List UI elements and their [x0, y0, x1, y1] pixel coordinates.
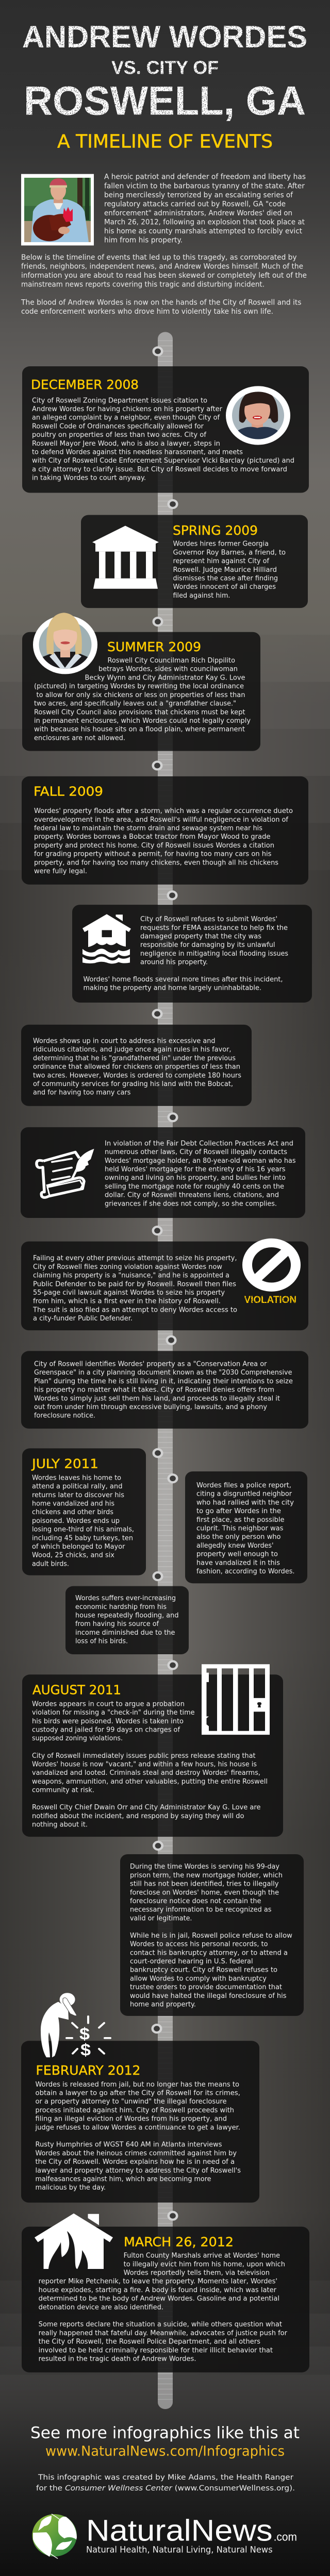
text block: vandalized and looted. Criminals steal and destroy Wordes' firearms,: [32, 1769, 260, 1777]
icon: courthouse: [92, 526, 159, 589]
portrait: Kay G. Love: [33, 613, 97, 674]
text block: Wordes innocent of all charges: [173, 583, 276, 591]
icon: despairing man with scattered money: $: [80, 2041, 91, 2059]
text block: Wordes files a police report,: [196, 1482, 291, 1489]
logo wordmark: .com: [274, 2531, 297, 2543]
text block: culprit. This neighbor was: [196, 1524, 283, 1532]
icon: despairing man with scattered money: $: [79, 2025, 90, 2043]
text block: with because his house sits on a flood plain, where permanent: [34, 725, 245, 733]
heading: Summer 2009: SUMMER 2009: [107, 640, 201, 655]
text block: to go after Wordes in the: [196, 1507, 281, 1515]
footer credit: [36, 2473, 295, 2493]
text block: ordinance that allowed for chickens on properties of less than: [33, 1063, 240, 1071]
text block: responsible for damaging by its unlawful: [140, 941, 275, 949]
text block: [173, 540, 286, 600]
text block: During the time Wordes is serving his 99-day: [130, 1863, 279, 1871]
panel: zoning violation: [21, 1242, 308, 1330]
text block: Wood, 25 chicks, and six: [32, 1551, 114, 1560]
text block: Wordes reportedly tells them, via television: [124, 2269, 270, 2277]
text block: in permanent enclosures, which Wordes could not legally comply: [34, 717, 251, 725]
text block: citing a disgruntled neighbor: [196, 1490, 292, 1498]
text block: foreclose on Wordes' home, even though the: [130, 1889, 279, 1896]
text block: lawyer and property attorney to address the City of Roswell's: [35, 2166, 241, 2175]
text block: allow Wordes to comply with bankruptcy: [130, 1975, 267, 1982]
text block: community at risk.: [32, 1786, 94, 1794]
text block: Roswell Code of Ordinances specifically allowed for: [32, 422, 204, 430]
text block: Andrew Wordes for having chickens on his property after: [32, 405, 222, 413]
title: ROSWELL, GA: [24, 78, 306, 124]
text block: Becky Wynn and City Administrator Kay G. Love: [85, 674, 245, 682]
text block: making the property and home largely uninhabitable.: [83, 984, 261, 992]
icon: jail cell door: [202, 1664, 270, 1735]
text block: [32, 1474, 134, 1568]
text block: [32, 397, 294, 482]
text block: filed against him.: [173, 591, 230, 600]
heading: August 2011: AUGUST 2011: [32, 1683, 121, 1698]
footer call to action: www.NaturalNews.com/Infographics: [45, 2443, 285, 2459]
text block: his property no matter what it takes. City of Roswell denies offers from: [34, 1386, 274, 1394]
text block: Wordes to simply just sell them his land, and proceeds to illegally steal it: [34, 1395, 280, 1402]
text block: [32, 1804, 261, 1828]
text block: with City of Roswell Code Enforcement Supervisor Vicki Barclay (pictured) and: [32, 457, 294, 465]
text block: Wordes about the heinous crimes committed against him by: [35, 2149, 237, 2157]
text block: Roswell Mayor Jere Wood, who is also a lawyer, steps in: [32, 439, 220, 448]
text block: Wordes is released from jail, but no longer has the means to: [35, 2080, 239, 2089]
text block: out from under him through excessive bullying, lawsuits, and a phony: [34, 1403, 267, 1411]
text block: Some reports declare the situation a suicide, while others question what: [39, 2320, 282, 2329]
text block: trustee orders to provide documentation that: [130, 1984, 282, 1991]
text block: resulted in the tragic death of Andrew Wordes.: [39, 2355, 196, 2363]
text block: Roswell City Chief Dwain Orr and City Administrator Kay G. Love are: [32, 1804, 261, 1811]
text block: negligence in mitigating local flooding issues: [140, 950, 288, 958]
text block: violation for missing a "check-in" during the time: [32, 1709, 195, 1717]
panel: conservation area: [21, 1351, 308, 1429]
text block: two acres, and specifically leaves out a "grandfather clause.": [34, 700, 236, 707]
text block: who had rallied with the city: [196, 1499, 294, 1506]
text block: [105, 1140, 296, 1208]
text block: owning and living on his property, and bullies her into: [105, 1174, 286, 1182]
text block: City of Roswell files zoning violation against Wordes now: [33, 1263, 222, 1271]
text block: chickens and other birds: [32, 1509, 113, 1516]
text block: [130, 1931, 292, 2008]
text block: [32, 1752, 268, 1794]
text block: custody and jailed for 99 days on charges of: [32, 1726, 180, 1734]
title: ANDREW WORDES: [22, 20, 307, 55]
text block: two acres. However, Wordes is ordered to complete 180 hours: [33, 1072, 241, 1079]
intro closing statement: [21, 298, 302, 316]
text block: determined to be the body of Andrew Wordes. Gasoline and a potential: [39, 2295, 279, 2302]
text block: for grading property without a permit, for having too many cars on his: [34, 850, 271, 858]
text block: contact his bankruptcy attorney, or to attend a: [130, 1949, 288, 1957]
text block: [32, 1700, 195, 1742]
text block: first place, as the possible: [196, 1516, 285, 1524]
text block: selling the mortgage note for roughly 40 cents on the: [105, 1183, 284, 1191]
text block: and for having too many cars: [33, 1089, 130, 1096]
text block: detonation device are also identified.: [39, 2303, 163, 2311]
text block: City of Roswell immediately issues public press release stating that: [32, 1752, 256, 1760]
portrait: Vicki Barclay: [226, 386, 290, 445]
text block: Rusty Humphries of WGST 640 AM in Atlanta interviews: [35, 2141, 222, 2148]
text block: represent him against City of: [173, 557, 270, 565]
text block: enclosures are not allowed.: [34, 734, 125, 742]
text block: a city attorney to clarify issue. But City of Roswell decides to move forward: [32, 465, 287, 473]
text block: really happened that fateful day. Meanwhile, advocates of justice push for: [39, 2329, 287, 2337]
text block: While he is in jail, Roswell police refuse to allow: [130, 1931, 292, 1940]
text block: still has not been identified, tries to illegally: [130, 1880, 279, 1888]
text block: [39, 2252, 285, 2311]
intro timeline explanation: [21, 252, 307, 289]
text block: malfeasances against him, which are becoming more: [35, 2175, 211, 2183]
text block: damaged property that the city was: [140, 933, 261, 940]
label: violation: VIOLATION: [244, 1295, 296, 1306]
intro closing statement: code enforcement workers who drove him to violently take his own life.: [21, 307, 273, 316]
text block: to defend Wordes against this needless harassment, and meets: [32, 448, 243, 456]
text block: the City of Roswell, the Roswell Police Department, and all others: [39, 2338, 260, 2346]
panel: Spring 2009: [81, 515, 308, 608]
intro paragraph: him from his property.: [104, 235, 183, 244]
text block: dismisses the case after finding: [173, 574, 278, 582]
text block: income diminished due to the: [75, 1629, 175, 1637]
text block: his birds were poisoned. Wordes is taken into: [32, 1717, 184, 1725]
text block: Greenspace" in a city planning document known as the "2030 Comprehensive: [34, 1369, 292, 1377]
intro paragraph: fallen victim to the barbarous tyranny of the state. After: [104, 181, 305, 190]
intro paragraph: being mercilessly terrorized by an escalating series of: [104, 190, 293, 199]
heading: Spring 2009: SPRING 2009: [173, 523, 258, 538]
heading: Fall 2009: FALL 2009: [34, 784, 103, 799]
text block: notified about the incident, and respond by saying they will do: [32, 1812, 244, 1820]
text block: in taking Wordes to court anyway.: [32, 474, 146, 482]
panel: August 2011: [22, 1664, 283, 1837]
text block: [83, 975, 283, 992]
intro timeline explanation: mainstream news reports covering this tragic and disturbing incident.: [21, 280, 265, 289]
text block: returns later to discover his: [32, 1491, 124, 1499]
title: [22, 20, 307, 124]
icon: scroll and quill: [37, 1149, 94, 1197]
text block: federal law to maintain the storm drain and sewage system near his: [34, 824, 262, 832]
text block: In violation of the Fair Debt Collection Practices Act and: [105, 1140, 293, 1147]
intro paragraph: [104, 172, 306, 244]
text block: determining that he is "grandfathered in" under the previous: [33, 1054, 236, 1062]
text block: home and property.: [130, 2001, 196, 2008]
panel: July 2011: [22, 1448, 146, 1575]
text block: [196, 1482, 294, 1575]
text block: to allow for only six chickens or less on properties of less than: [36, 691, 245, 699]
text block: Public Defender to be paid for by Roswell. Roswell then files: [33, 1280, 236, 1288]
text block: overdevelopment in the area, and Roswell's willful negligence in violation of: [34, 816, 289, 824]
heading: March 26, 2012: MARCH 26, 2012: [124, 2235, 234, 2250]
text block: property, and for having too many chickens, even though all his chickens: [34, 859, 278, 867]
panel: economic hardship: [65, 1586, 189, 1654]
text block: (pictured) in targeting Wordes by rewriting the local ordinance: [34, 683, 244, 690]
heading: July 2011: JULY 2011: [31, 1457, 98, 1471]
text block: City of Roswell identifies Wordes' property as a "Conservation Area or: [34, 1360, 267, 1368]
text block: dollar. City of Roswell threatens liens, citations, and: [105, 1191, 279, 1199]
text block: [34, 1360, 293, 1420]
text block: to illegally evict him from his home, upon which: [124, 2260, 285, 2268]
text block: judge refuses to allow Wordes a continuance to get a lawyer.: [35, 2124, 240, 2131]
logo: Natural News globe: [32, 2514, 77, 2558]
panel: February 2012: [21, 1993, 259, 2202]
text block: foreclosure notice.: [34, 1412, 95, 1420]
text block: court-ordered hearing in U.S. federal: [130, 1958, 253, 1965]
text block: an alleged complaint by a neighbor, even though City of: [32, 414, 220, 422]
text block: poisoned. Wordes ends up: [32, 1517, 120, 1525]
text block: of community services for grading his land with the Bobcat,: [33, 1080, 233, 1088]
text block: [34, 807, 293, 875]
text block: involved to be held criminally responsible for their illicit behavior that: [39, 2346, 273, 2354]
text block: [130, 1863, 283, 1922]
text block: [32, 1255, 237, 1323]
intro paragraph: enforcement" administrators, Andrew Wordes' died on: [104, 209, 292, 217]
text block: have vandalized it in this: [196, 1559, 280, 1567]
text block: valid or legitimate.: [130, 1914, 192, 1922]
text block: property. Wordes borrows a Bobcat tractor from Mayor Wood to grade: [34, 833, 271, 841]
text block: the City of Roswell. Wordes explains how he is in need of a: [35, 2158, 235, 2166]
text block: Wordes to access his personal records, to: [130, 1940, 268, 1948]
text block: Roswell. Judge Maurice Hilliard: [173, 566, 277, 574]
text block: Wordes appears in court to argue a probation: [32, 1700, 185, 1708]
text block: economic hardship from his: [75, 1603, 167, 1611]
text block: around his property.: [140, 958, 208, 966]
logo wordmark: Natural Health, Natural Living, Natural News: [86, 2545, 273, 2555]
icon: flooded house: [82, 914, 131, 963]
icon: burning house: [35, 2213, 113, 2269]
text block: Wordes' home floods several more times after this incident,: [83, 975, 283, 984]
text block: bankruptcy court. City of Roswell refuses to: [130, 1966, 277, 1974]
text block: supposed zoning violations.: [32, 1735, 123, 1742]
title: VS. CITY OF: [111, 57, 219, 78]
text block: foreclosure notice does not contain the: [130, 1897, 261, 1905]
photo: Andrew Wordes with rooster: [21, 174, 94, 245]
text block: malicious by the day.: [35, 2184, 106, 2192]
text block: [75, 1595, 178, 1645]
panel: police report: [185, 1471, 307, 1583]
footer call to action: [30, 2424, 300, 2459]
text block: reporter Mike Petchenik, to leave the property. Moments later, Wordes': [39, 2278, 277, 2285]
text block: Wordes' house is now "vacant," and within a few hours, his house is: [32, 1760, 257, 1768]
text block: home vandalized and his: [32, 1500, 114, 1507]
text block: of which belonged to Mayor: [32, 1543, 125, 1551]
panel: March 26, 2012: [22, 2213, 309, 2372]
text block: losing one-third of his animals,: [32, 1526, 134, 1533]
text block: Roswell City Council also provisions that chickens must be kept: [34, 708, 245, 716]
text block: nothing about it.: [32, 1821, 88, 1828]
text block: City of Roswell refuses to submit Wordes': [140, 916, 277, 923]
text block: [33, 1037, 241, 1096]
subtitle: A TIMELINE OF EVENTS: [57, 130, 273, 152]
text block: ridiculous citations, and judge once again rules in his favor,: [33, 1046, 231, 1054]
text block: also the only person who: [196, 1533, 280, 1541]
intro paragraph: regulatory attacks carried out by Roswell, GA "code: [104, 199, 286, 208]
text block: Roswell City Councilman Rich Dippilito: [107, 657, 235, 665]
text block: from having his source of: [75, 1620, 159, 1628]
text block: allegedly knew Wordes': [196, 1541, 273, 1550]
text block: process initiated against him. City of Roswell proceeds with: [35, 2107, 234, 2114]
text block: Wordes' mortgage holder, an 80-year-old woman who has: [105, 1157, 296, 1165]
panel: Fall 2009: [22, 776, 308, 885]
text block: Failing at every other previous attempt to seize his property,: [33, 1255, 237, 1262]
logo wordmark: NaturalNews: [86, 2514, 273, 2547]
text block: weapons, ammunition, and other valuables, putting the entire Roswell: [32, 1777, 268, 1786]
text block: a city-funder Public Defender.: [33, 1315, 133, 1323]
text block: or a property attorney to "unwind" the illegal foreclosure: [35, 2098, 227, 2106]
text block: house repeatedly flooding, and: [75, 1612, 178, 1619]
text block: necessary information to be recognized as: [130, 1906, 271, 1914]
panel: December 2008: [22, 366, 309, 493]
text block: property and protect his home. City of Roswell issues Wordes a citation: [34, 842, 274, 850]
text block: [35, 2141, 241, 2192]
text block: filing an illegal eviction of Wordes from his property, and: [35, 2115, 227, 2123]
text block: [39, 2320, 287, 2363]
text block: Governor Roy Barnes, a friend, to: [173, 549, 286, 556]
timeline markers: [153, 347, 177, 2219]
text block: Wordes hires former Georgia: [173, 540, 269, 548]
text block: grievances if she does not comply, so she complies.: [105, 1200, 277, 1208]
text block: fashion, according to Wordes.: [196, 1568, 294, 1575]
text block: numerous other laws, City of Roswell illegally contacts: [105, 1148, 287, 1156]
text block: City of Roswell Zoning Department issues citation to: [32, 397, 207, 404]
text block: requests for FEMA assistance to help fix the: [140, 924, 288, 932]
icon: prohibition sign: [248, 1243, 296, 1287]
heading: December 2008: DECEMBER 2008: [31, 378, 139, 393]
text block: house explodes, starting a fire. A body is found inside, which was later: [39, 2286, 276, 2294]
panel: FEMA refusal: [72, 905, 312, 1003]
text block: Plan" during the time he is still living in it, indicating their intentions to seize: [34, 1377, 293, 1385]
icon: despairing man with scattered money: [41, 1993, 110, 2059]
text block: [140, 916, 288, 966]
text block: property well enough to: [196, 1550, 278, 1558]
footer credit: This infographic was created by Mike Adams, the Health Ranger: [38, 2473, 294, 2482]
panel: prison term: [120, 1854, 304, 2016]
heading: February 2012: FEBRUARY 2012: [36, 2063, 141, 2078]
footer credit: for the Consumer Wellness Center (www.ConsumerWellness.org).: [36, 2484, 295, 2493]
text block: prison term, the new mortgage holder, which: [130, 1871, 283, 1879]
text block: claiming his property is a "nuisance," and he is appointed a: [33, 1272, 229, 1279]
text block: from him, which is a first ever in the history of Roswell.: [33, 1297, 221, 1305]
text block: [35, 2080, 240, 2131]
text block: The suit is also filed as an attempt to deny Wordes access to: [32, 1306, 237, 1314]
panel: debt collection violation: [21, 1127, 305, 1218]
text block: Wordes leaves his home to: [32, 1474, 121, 1482]
timeline bar: [158, 332, 173, 2409]
text block: adult birds.: [32, 1560, 69, 1568]
text block: betrays Wordes, sides with councilwoman: [98, 665, 238, 673]
text block: Fulton County Marshals arrive at Wordes' home: [124, 2252, 280, 2260]
footer call to action: See more infographics like this at: [30, 2424, 300, 2442]
text block: obtain a lawyer to go after the City of Roswell for its crimes,: [35, 2089, 240, 2097]
text block: poultry on properties of less than two acres. City of: [32, 431, 207, 439]
text block: were fully legal.: [34, 868, 87, 875]
text block: Wordes suffers ever-increasing: [75, 1595, 176, 1602]
text block: Wordes shows up in court to address his excessive and: [33, 1037, 215, 1045]
panel: Summer 2009: [22, 613, 260, 751]
text block: 55-page civil lawsuit against Wordes to seize his property: [33, 1289, 225, 1297]
text block: attend a political rally, and: [32, 1483, 122, 1490]
panel: court ruling: [21, 1025, 252, 1106]
text block: loss of his birds.: [75, 1637, 128, 1645]
text block: Wordes' property floods after a storm, which was a regular occurrence dueto: [34, 807, 293, 815]
text block: would have halted the illegal foreclosure of his: [130, 1992, 287, 2000]
text block: [34, 657, 251, 742]
text block: including 45 baby turkeys, ten: [32, 1534, 133, 1542]
text block: held Wordes' mortgage for the entirety of his 16 years: [105, 1165, 286, 1173]
